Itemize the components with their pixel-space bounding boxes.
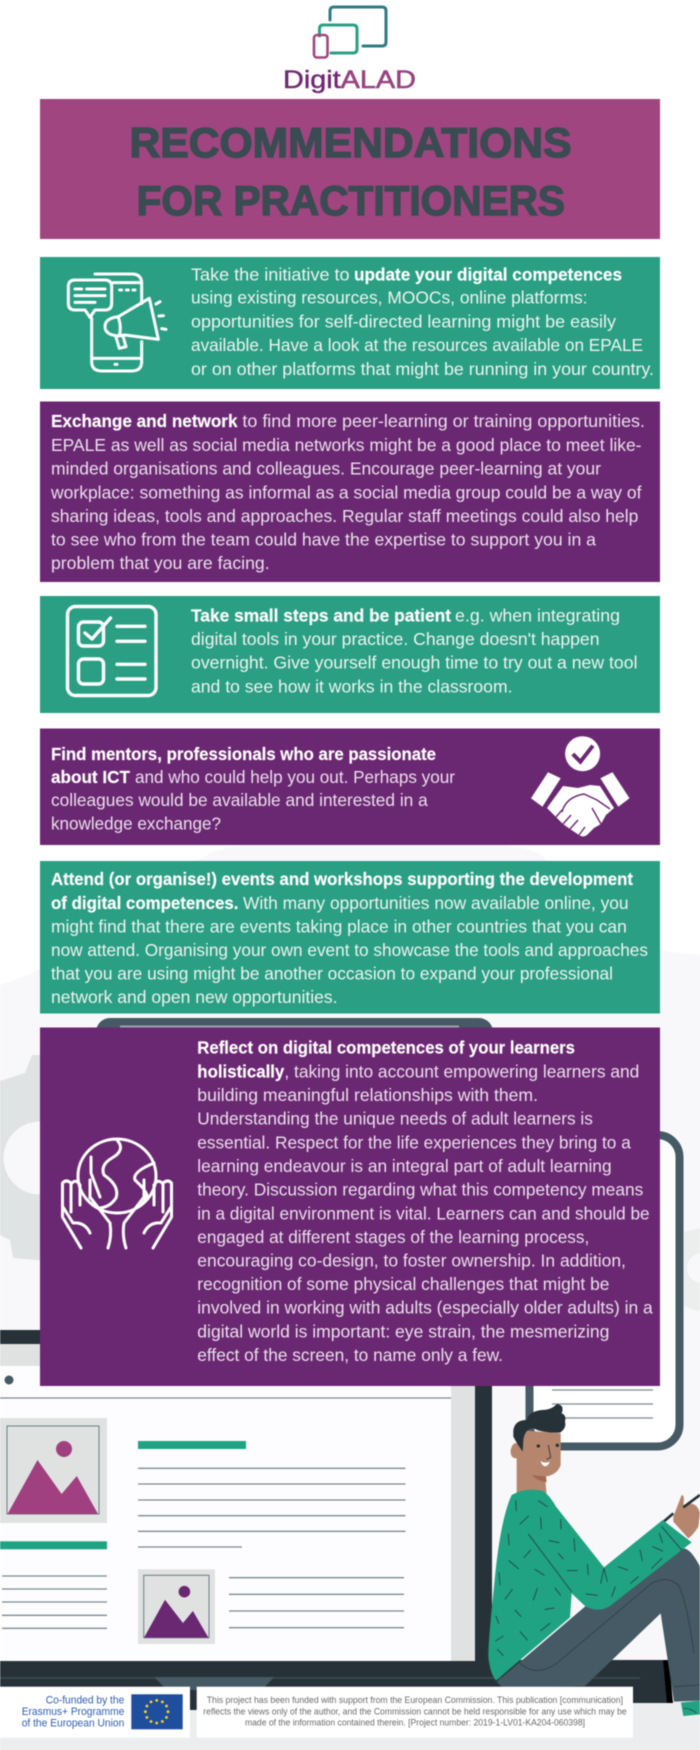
monitor [0, 1330, 673, 1710]
text block: minded organisations and colleagues. Encourage peer-learning at your [51, 458, 601, 478]
text block: now attend. Organising your own event to showcase the tools and approaches [51, 940, 648, 960]
title: FOR PRACTITIONERS [137, 177, 565, 224]
person sitting with phone [488, 1404, 700, 1716]
text block: sharing ideas, tools and approaches. Regular staff meetings could also help [51, 506, 638, 526]
text block: to find more peer-learning or training opportunities. [242, 411, 645, 431]
co-funding text: Co-funded by the [46, 1694, 124, 1706]
text block: knowledge exchange? [51, 814, 221, 834]
text block: theory. Discussion regarding what this competency means [197, 1180, 644, 1200]
text block: Find mentors, professionals who are passionate [51, 744, 436, 764]
text block: using existing resources, MOOCs, online platforms: [191, 288, 588, 308]
text block: recognition of some physical challenges that might be [197, 1274, 609, 1294]
text block: update your digital competences [354, 264, 622, 284]
text block: of digital competences. [51, 893, 238, 913]
text block: available. Have a look at the resources available on EPALE [191, 335, 643, 355]
disclaimer text: made of the information contained therein. [Project number: 2019-1-LV01-KA204-060398] [245, 1718, 585, 1728]
icon: background gear left [0, 1055, 76, 1262]
disclaimer text: reflects the views only of the author, and the Commission cannot be held responsible for any use which may be [203, 1706, 627, 1716]
panel: title [40, 99, 660, 239]
text block: digital world is important: eye strain, the mesmerizing [197, 1321, 609, 1341]
co-funding text: of the European Union [22, 1718, 124, 1730]
icon: hands holding globe [62, 1139, 172, 1248]
text block: involved in working with adults (especially older adults) in a [197, 1298, 653, 1318]
disclaimer text [203, 1695, 627, 1728]
text lines left column [2, 1576, 107, 1628]
text block: building meaningful relationships with them. [197, 1085, 538, 1105]
icon: checklist [68, 606, 156, 696]
text lines beside small picture [229, 1578, 404, 1628]
text block: about ICT [51, 767, 130, 787]
text block: Take the initiative to [191, 264, 350, 284]
text block [51, 744, 455, 834]
icon: devices [314, 7, 386, 58]
text block: and who could help you out. Perhaps your [135, 767, 455, 787]
text block: that you are using might be another occasion to expand your professional [51, 964, 613, 984]
text block: colleagues would be available and interested in a [51, 790, 428, 810]
text block: engaged at different stages of the learning process, [197, 1227, 589, 1247]
green heading bar left [0, 1541, 107, 1549]
text block: effect of the screen, to name only a few. [197, 1345, 503, 1365]
title: RECOMMENDATIONS [130, 119, 572, 166]
text block: Take small steps and be patient [191, 606, 451, 626]
footer: Erasmus+ co-funding [0, 1687, 190, 1738]
text block: Understanding the unique needs of adult learners is [197, 1109, 593, 1129]
panel: exchange and network [40, 402, 660, 582]
footer: disclaimer [197, 1687, 633, 1738]
text block: Attend (or organise!) events and workshops supporting the development [51, 869, 633, 889]
panel: update digital competences [40, 257, 660, 389]
text block: e.g. when integrating [455, 606, 620, 626]
title [130, 119, 572, 224]
logo wordmark: Digit ALAD [283, 66, 416, 94]
text block: digital tools in your practice. Change doesn't happen [191, 629, 600, 649]
text block: holistically [197, 1061, 285, 1081]
disclaimer text: This project has been funded with support from the European Commission. This publication [communication] [207, 1695, 623, 1705]
window behind the panel [96, 1018, 493, 1058]
text block: workplace: something as informal as a social media group could be a way of [50, 482, 642, 502]
text block: , taking into account empowering learners and [284, 1061, 639, 1081]
panel: attend events [40, 861, 660, 1014]
text block: encouraging co-design, to foster ownership. In addition, [197, 1251, 626, 1271]
text block: network and open new opportunities. [51, 987, 338, 1007]
icon: phone with megaphone [68, 274, 166, 371]
logo: DigitALAD [283, 7, 416, 94]
text block: essential. Respect for the life experiences they bring to a [197, 1132, 631, 1152]
text block: in a digital environment is vital. Learners can and should be [197, 1203, 650, 1223]
co-funding text: Erasmus+ Programme [22, 1706, 124, 1718]
text lines centre column [138, 1468, 406, 1547]
picture placeholder small [138, 1569, 215, 1644]
floating window right [530, 1135, 680, 1446]
text block: Exchange and network [51, 411, 238, 431]
text block [51, 869, 648, 1007]
green heading bar [138, 1441, 246, 1449]
picture placeholder large [0, 1418, 107, 1523]
text block [191, 606, 638, 696]
background illustration [0, 845, 700, 1750]
text block: opportunities for self-directed learning might be easily [191, 312, 616, 332]
icon: handshake with check [531, 736, 630, 836]
panel: small steps [40, 596, 660, 713]
text block [50, 411, 645, 573]
text block: EPALE as well as social media networks might be a good place to meet like- [51, 435, 642, 455]
text block: overnight. Give yourself enough time to try out a new tool [191, 653, 638, 673]
panel: find mentors [40, 728, 660, 845]
text block: learning endeavour is an integral part of adult learning [197, 1156, 612, 1176]
text block: and to see how it works in the classroom. [191, 676, 512, 696]
text block [197, 1038, 653, 1365]
icon: EU flag [131, 1694, 183, 1729]
text block: or on other platforms that might be running in your country. [191, 359, 654, 379]
panel: reflect on learners [40, 1028, 660, 1386]
icon: background gear right [684, 1228, 700, 1312]
text block [191, 264, 654, 379]
text block: problem that you are facing. [51, 553, 270, 573]
text block: With many opportunities now available online, you [243, 893, 629, 913]
text block: might find that there are events taking place in other countries that you can [51, 916, 627, 936]
co-funding text [22, 1694, 124, 1730]
text block: Reflect on digital competences of your learners [197, 1038, 575, 1058]
text block: to see who from the team could have the expertise to support you in a [51, 530, 596, 550]
